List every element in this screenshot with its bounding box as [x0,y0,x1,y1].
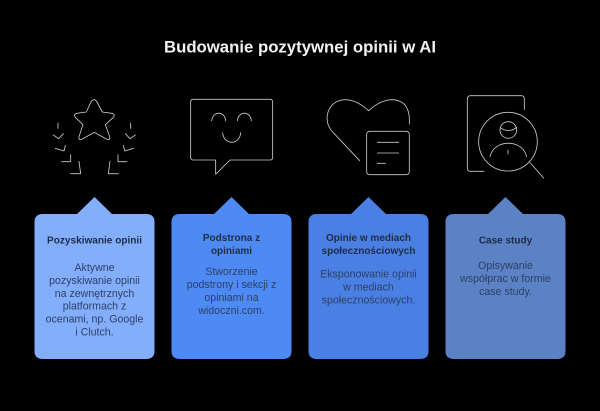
icon: document with magnifier and person [467,96,544,178]
text: card 1 description: i Clutch. [75,326,114,338]
text: card 1 description [46,262,143,338]
text: card 4 description: case study. [479,286,532,298]
text: card 3 description: Eksponowanie opinii [320,268,417,280]
text: card 1 description: Aktywne [74,262,115,274]
text: card 2 description [187,266,276,317]
text: card 3 description: w mediach [342,282,394,294]
icon: smiling speech bubble [191,99,273,174]
text: card 4 description: współprac w formie [459,273,551,285]
text: card 2 description: opiniami na [204,292,259,304]
text: card 1 description: na zewnętrznych [55,288,134,300]
heading: Podstrona z opiniami: opiniami [211,246,252,257]
text: card 2 description: Stworzenie [205,266,258,278]
text: card 3 description [320,268,417,306]
title: Budowanie pozytywnej opinii w AI [164,38,436,56]
text: card 1 description: ocenami, np. Google [46,314,143,326]
text: card 4 description [459,260,551,298]
heading: Opinie w mediach społecznościowych: społecznościowych [322,246,415,257]
card: Podstrona z opiniami [172,197,292,359]
text: card 4 description: Opisywanie [478,260,533,272]
heading: Pozyskiwanie opinii: Pozyskiwanie opinii [47,236,142,246]
card: Opinie w mediach społecznościowych [308,197,428,359]
text: card 1 description: pozyskiwanie opinii [49,275,140,287]
icon: heart with document [327,100,409,175]
heading: Case study: Case study [479,236,533,246]
text: card 2 description: podstrony i sekcji z [187,279,276,291]
icon: star with laurel [53,100,135,174]
text: card 3 description: społecznościowych. [322,294,415,306]
heading: Podstrona z opiniami: Podstrona z [203,233,260,244]
heading: Opinie w mediach społecznościowych [322,233,415,257]
heading: Opinie w mediach społecznościowych: Opinie w mediach [326,233,411,244]
card: Case study [446,197,566,359]
heading: Podstrona z opiniami [203,233,260,257]
text: card 2 description: widoczni.com. [197,305,265,317]
card: Pozyskiwanie opinii [34,197,154,359]
text: card 1 description: platformach z [63,300,126,312]
